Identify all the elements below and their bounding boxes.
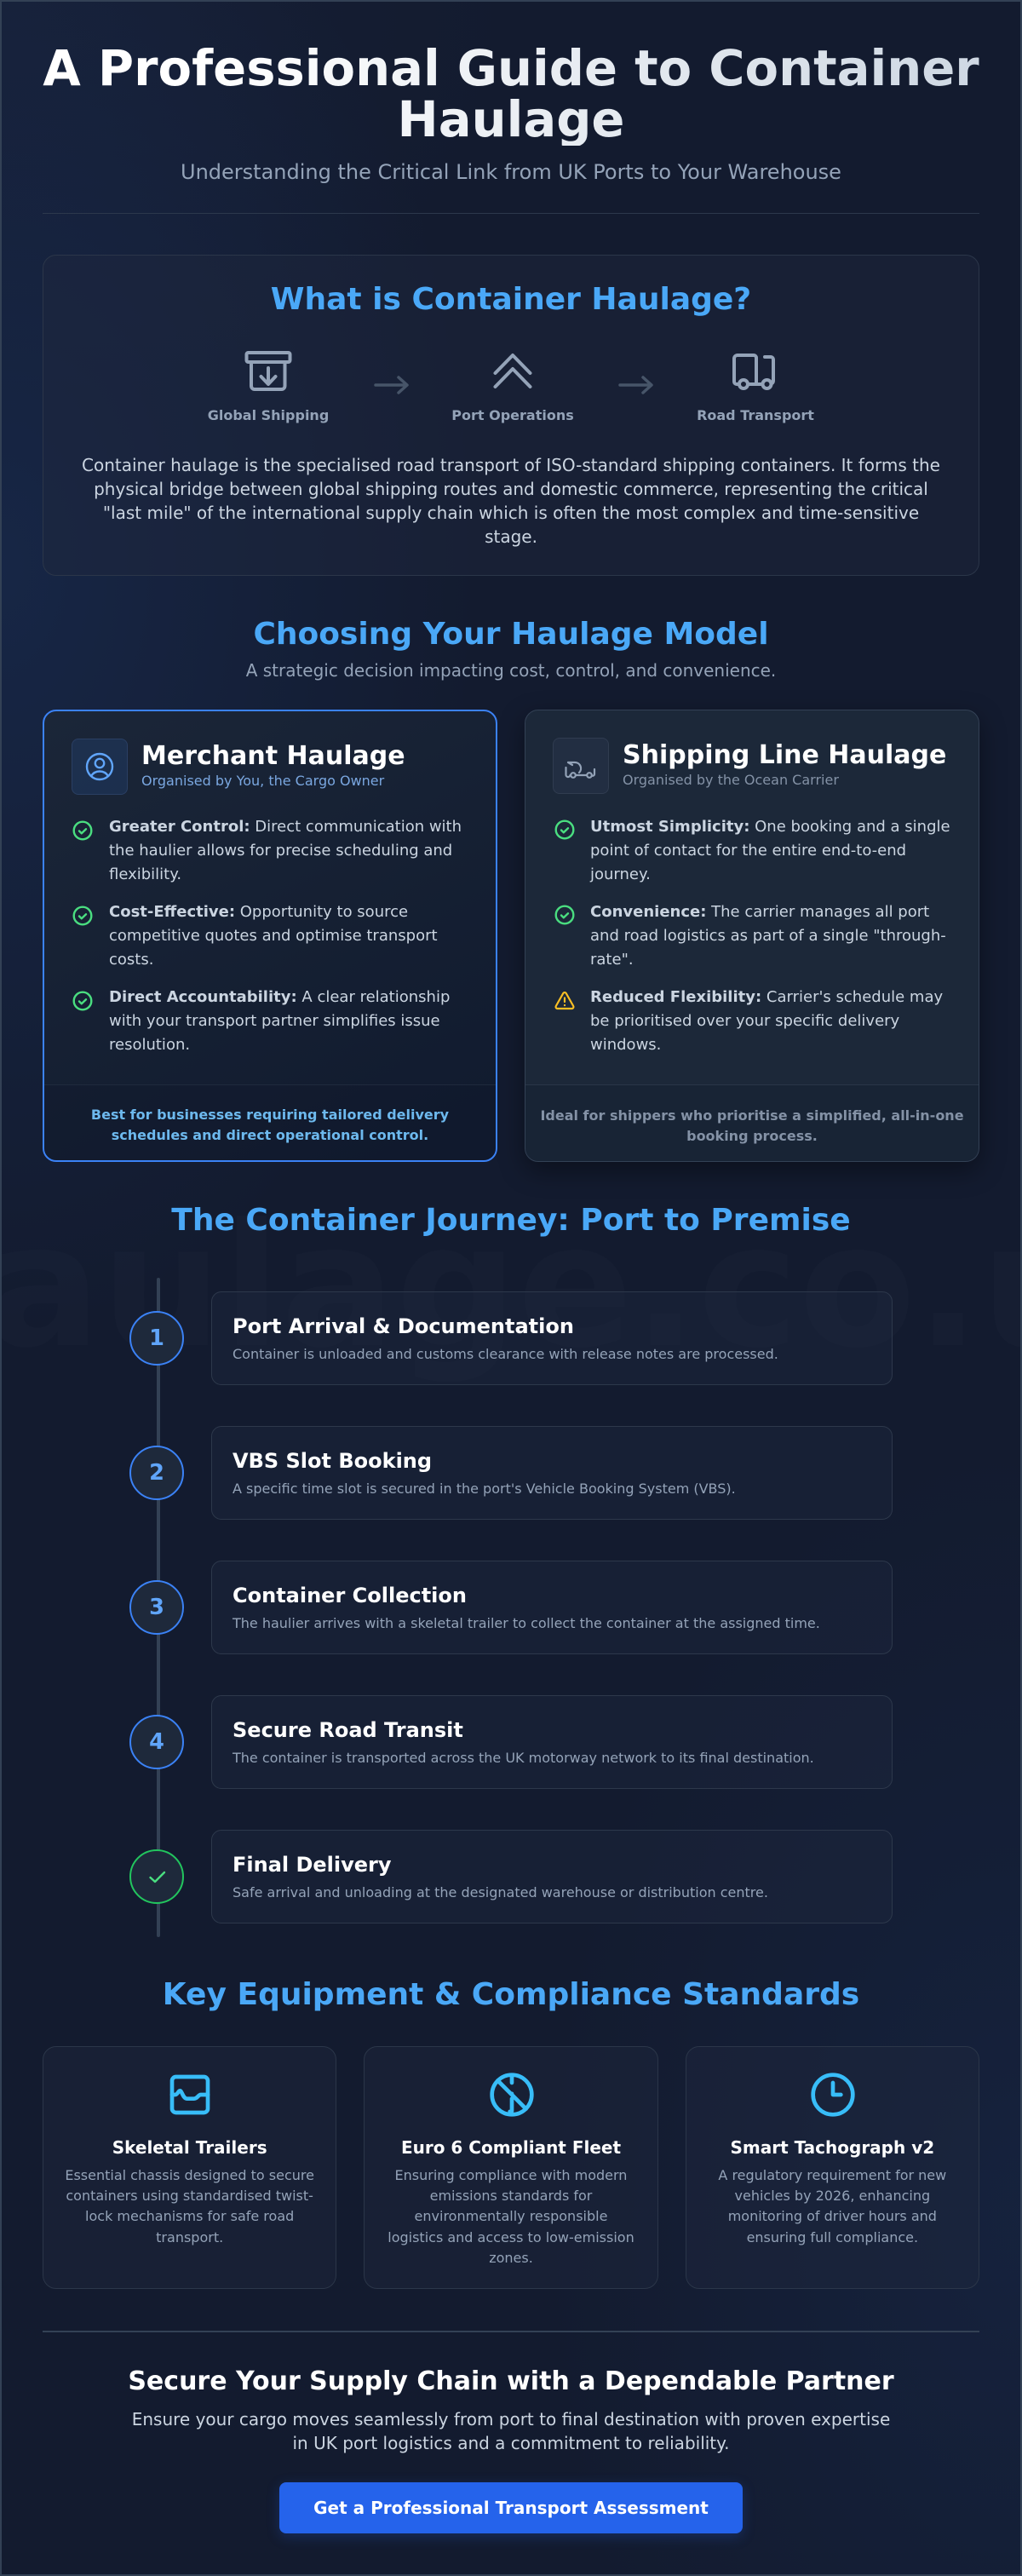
text xyxy=(589,818,950,883)
card: Container Collection xyxy=(233,1584,467,1607)
text: windows. xyxy=(590,1036,661,1054)
arrow xyxy=(618,376,653,394)
label: road transport: Road Transport xyxy=(697,407,814,423)
panel: shipping line haulage xyxy=(525,710,979,1162)
card: Container is unloaded and customs clearance with release notes are processed. xyxy=(233,1346,778,1362)
text: Greater Control: Direct communication with xyxy=(109,818,462,836)
text: journey. xyxy=(590,865,651,883)
callout: merchant best for xyxy=(44,1084,496,1160)
icon: check xyxy=(555,905,574,925)
text: Direct Accountability: A clear relationship xyxy=(109,988,450,1006)
icon: trailer xyxy=(553,738,609,794)
card xyxy=(211,1291,893,1385)
step 1 xyxy=(129,1291,893,1385)
text: point of contact for the entire end-to-end xyxy=(590,842,906,860)
card xyxy=(211,1695,893,1789)
description: logistics and access to low-emission xyxy=(388,2229,634,2245)
title: Skeletal Trailers xyxy=(112,2137,267,2158)
text: be prioritised over your specific delivery xyxy=(590,1012,899,1030)
marker: 3 xyxy=(149,1595,164,1620)
text: Reduced Flexibility: Carrier's schedule may xyxy=(590,988,943,1006)
timeline xyxy=(129,1278,893,1937)
text: costs. xyxy=(109,951,153,969)
icon: check xyxy=(73,992,92,1010)
icon: user xyxy=(72,739,128,795)
card xyxy=(211,1426,893,1520)
icon: check xyxy=(73,821,92,840)
marker xyxy=(129,1446,184,1500)
step 5 xyxy=(129,1830,893,1923)
benefit: greater control xyxy=(73,818,462,883)
marker: check xyxy=(129,1849,184,1904)
cta text xyxy=(132,2409,890,2453)
marker: 2 xyxy=(149,1460,164,1486)
cta button xyxy=(279,2482,743,2533)
arrow xyxy=(374,376,409,394)
label: global shipping: Global Shipping xyxy=(208,407,329,423)
description: stage. xyxy=(485,526,537,547)
callout: merchant best for: schedules and direct operational control. xyxy=(112,1127,428,1143)
icon: global shipping xyxy=(245,351,291,391)
drawback: reduced flexibility xyxy=(554,988,943,1054)
text xyxy=(109,818,462,883)
heading: the container journey: The Container Journey: Port to Premise xyxy=(171,1203,851,1238)
benefit: utmost simplicity xyxy=(555,818,950,883)
description: Essential chassis designed to secure xyxy=(65,2167,314,2183)
cta button: Get a Professional Transport Assessment xyxy=(313,2498,709,2518)
marker xyxy=(129,1580,184,1635)
card: VBS Slot Booking xyxy=(233,1449,432,1473)
card xyxy=(211,1561,893,1654)
description: Ensuring compliance with modern xyxy=(395,2167,627,2183)
card: Port Arrival & Documentation xyxy=(233,1314,574,1338)
text xyxy=(109,988,450,1054)
title xyxy=(0,43,1022,146)
text xyxy=(590,988,943,1054)
description: A regulatory requirement for new xyxy=(718,2167,946,2183)
text: Utmost Simplicity: One booking and a single xyxy=(590,818,950,836)
flow: shipping to road xyxy=(208,351,814,423)
description: monitoring of driver hours and xyxy=(728,2208,937,2224)
icon: check xyxy=(555,819,574,840)
icon: emissions xyxy=(490,2073,534,2117)
icon: clock xyxy=(811,2073,855,2117)
description xyxy=(718,2167,946,2245)
panel: skeletal trailers xyxy=(43,2046,336,2289)
icon: check xyxy=(73,906,92,925)
panel: merchant haulage xyxy=(43,710,497,1162)
text: flexibility. xyxy=(109,865,181,883)
panel: smart tachograph xyxy=(686,2046,979,2289)
icon: trailer frame xyxy=(170,2075,210,2114)
title: A Professional Guide to Container xyxy=(43,40,979,97)
text: competitive quotes and optimise transport xyxy=(109,927,438,945)
heading: what is container haulage: What is Container Haulage? xyxy=(271,282,751,317)
marker: 4 xyxy=(149,1729,164,1755)
callout: shipping line ideal for: booking process. xyxy=(686,1128,818,1144)
card: The haulier arrives with a skeletal trailer to collect the container at the assigned time. xyxy=(233,1615,820,1631)
marker xyxy=(129,1715,184,1769)
description: transport. xyxy=(156,2229,223,2245)
title: Euro 6 Compliant Fleet xyxy=(401,2137,621,2158)
icon: warning xyxy=(554,992,575,1010)
cta heading: Secure Your Supply Chain with a Dependable Partner xyxy=(128,2366,894,2396)
step 3 xyxy=(129,1561,893,1654)
text: rate". xyxy=(590,951,634,969)
description: vehicles by 2026, enhancing xyxy=(734,2188,930,2204)
subtitle: shipping line haulage: Organised by the Ocean Carrier xyxy=(623,772,839,788)
label: port operations: Port Operations xyxy=(451,407,574,423)
text: and road logistics as part of a single "through- xyxy=(590,927,946,945)
marker xyxy=(129,1311,184,1366)
description xyxy=(82,455,940,547)
callout: merchant best for: Best for businesses requiring tailored delivery xyxy=(91,1107,449,1123)
heading: key equipment: Key Equipment & Compliance Standards xyxy=(163,1977,859,2012)
description: environmentally responsible xyxy=(415,2208,607,2224)
panel: what is container haulage xyxy=(43,255,979,576)
cta text: in UK port logistics and a commitment to reliability. xyxy=(293,2433,729,2453)
description: "last mile" of the international supply chain which is often the most complex and time-sensitive xyxy=(103,503,919,523)
benefit: convenience xyxy=(555,903,946,969)
benefit: direct accountability xyxy=(73,988,450,1054)
card: Final Delivery xyxy=(233,1853,392,1877)
description: ensuring full compliance. xyxy=(747,2229,918,2245)
text: with your transport partner simplifies issue xyxy=(109,1012,440,1030)
callout: shipping line ideal for: Ideal for shippers who prioritise a simplified, all-in-one xyxy=(540,1107,964,1124)
title: merchant haulage: Merchant Haulage xyxy=(141,741,405,771)
heading: choosing your haulage model: Choosing Your Haulage Model xyxy=(253,617,769,652)
card: A specific time slot is secured in the port's Vehicle Booking System (VBS). xyxy=(233,1481,736,1497)
description xyxy=(65,2167,314,2245)
subtitle: Understanding the Critical Link from UK Ports to Your Warehouse xyxy=(181,160,841,184)
description: lock mechanisms for safe road xyxy=(85,2208,294,2224)
panel: euro 6 xyxy=(364,2046,658,2289)
text: the haulier allows for precise scheduling and xyxy=(109,842,452,860)
card: Secure Road Transit xyxy=(233,1718,463,1742)
description: zones. xyxy=(489,2250,533,2266)
icon: road transport xyxy=(732,354,775,390)
text: resolution. xyxy=(109,1036,190,1054)
description: Container haulage is the specialised road transport of ISO-standard shipping containers. It forms the xyxy=(82,455,940,475)
cta text: Ensure your cargo moves seamlessly from port to final destination with proven expertise xyxy=(132,2409,890,2429)
description: containers using standardised twist- xyxy=(66,2188,313,2204)
description: emissions standards for xyxy=(430,2188,592,2204)
title: Smart Tachograph v2 xyxy=(730,2137,934,2158)
subheading: A strategic decision impacting cost, control, and convenience. xyxy=(246,660,776,681)
text xyxy=(109,903,438,969)
card xyxy=(211,1830,893,1923)
description xyxy=(388,2167,634,2266)
step 2 xyxy=(129,1426,893,1520)
card: Safe arrival and unloading at the designated warehouse or distribution centre. xyxy=(233,1884,768,1900)
benefit: cost-effective xyxy=(73,903,438,969)
title: Haulage xyxy=(398,91,624,148)
callout: shipping line ideal for xyxy=(525,1084,979,1161)
subtitle: merchant haulage: Organised by You, the Cargo Owner xyxy=(141,773,384,789)
icon: port operations xyxy=(493,353,532,388)
step 4 xyxy=(129,1695,893,1789)
text: Convenience: The carrier manages all port xyxy=(590,903,929,921)
text: Cost-Effective: Opportunity to source xyxy=(109,903,408,921)
description: physical bridge between global shipping routes and domestic commerce, representing the critical xyxy=(94,479,928,499)
title: shipping line haulage: Shipping Line Haulage xyxy=(623,740,946,770)
card: The container is transported across the UK motorway network to its final destination. xyxy=(233,1750,814,1766)
text xyxy=(590,903,946,969)
marker: 1 xyxy=(149,1325,164,1351)
